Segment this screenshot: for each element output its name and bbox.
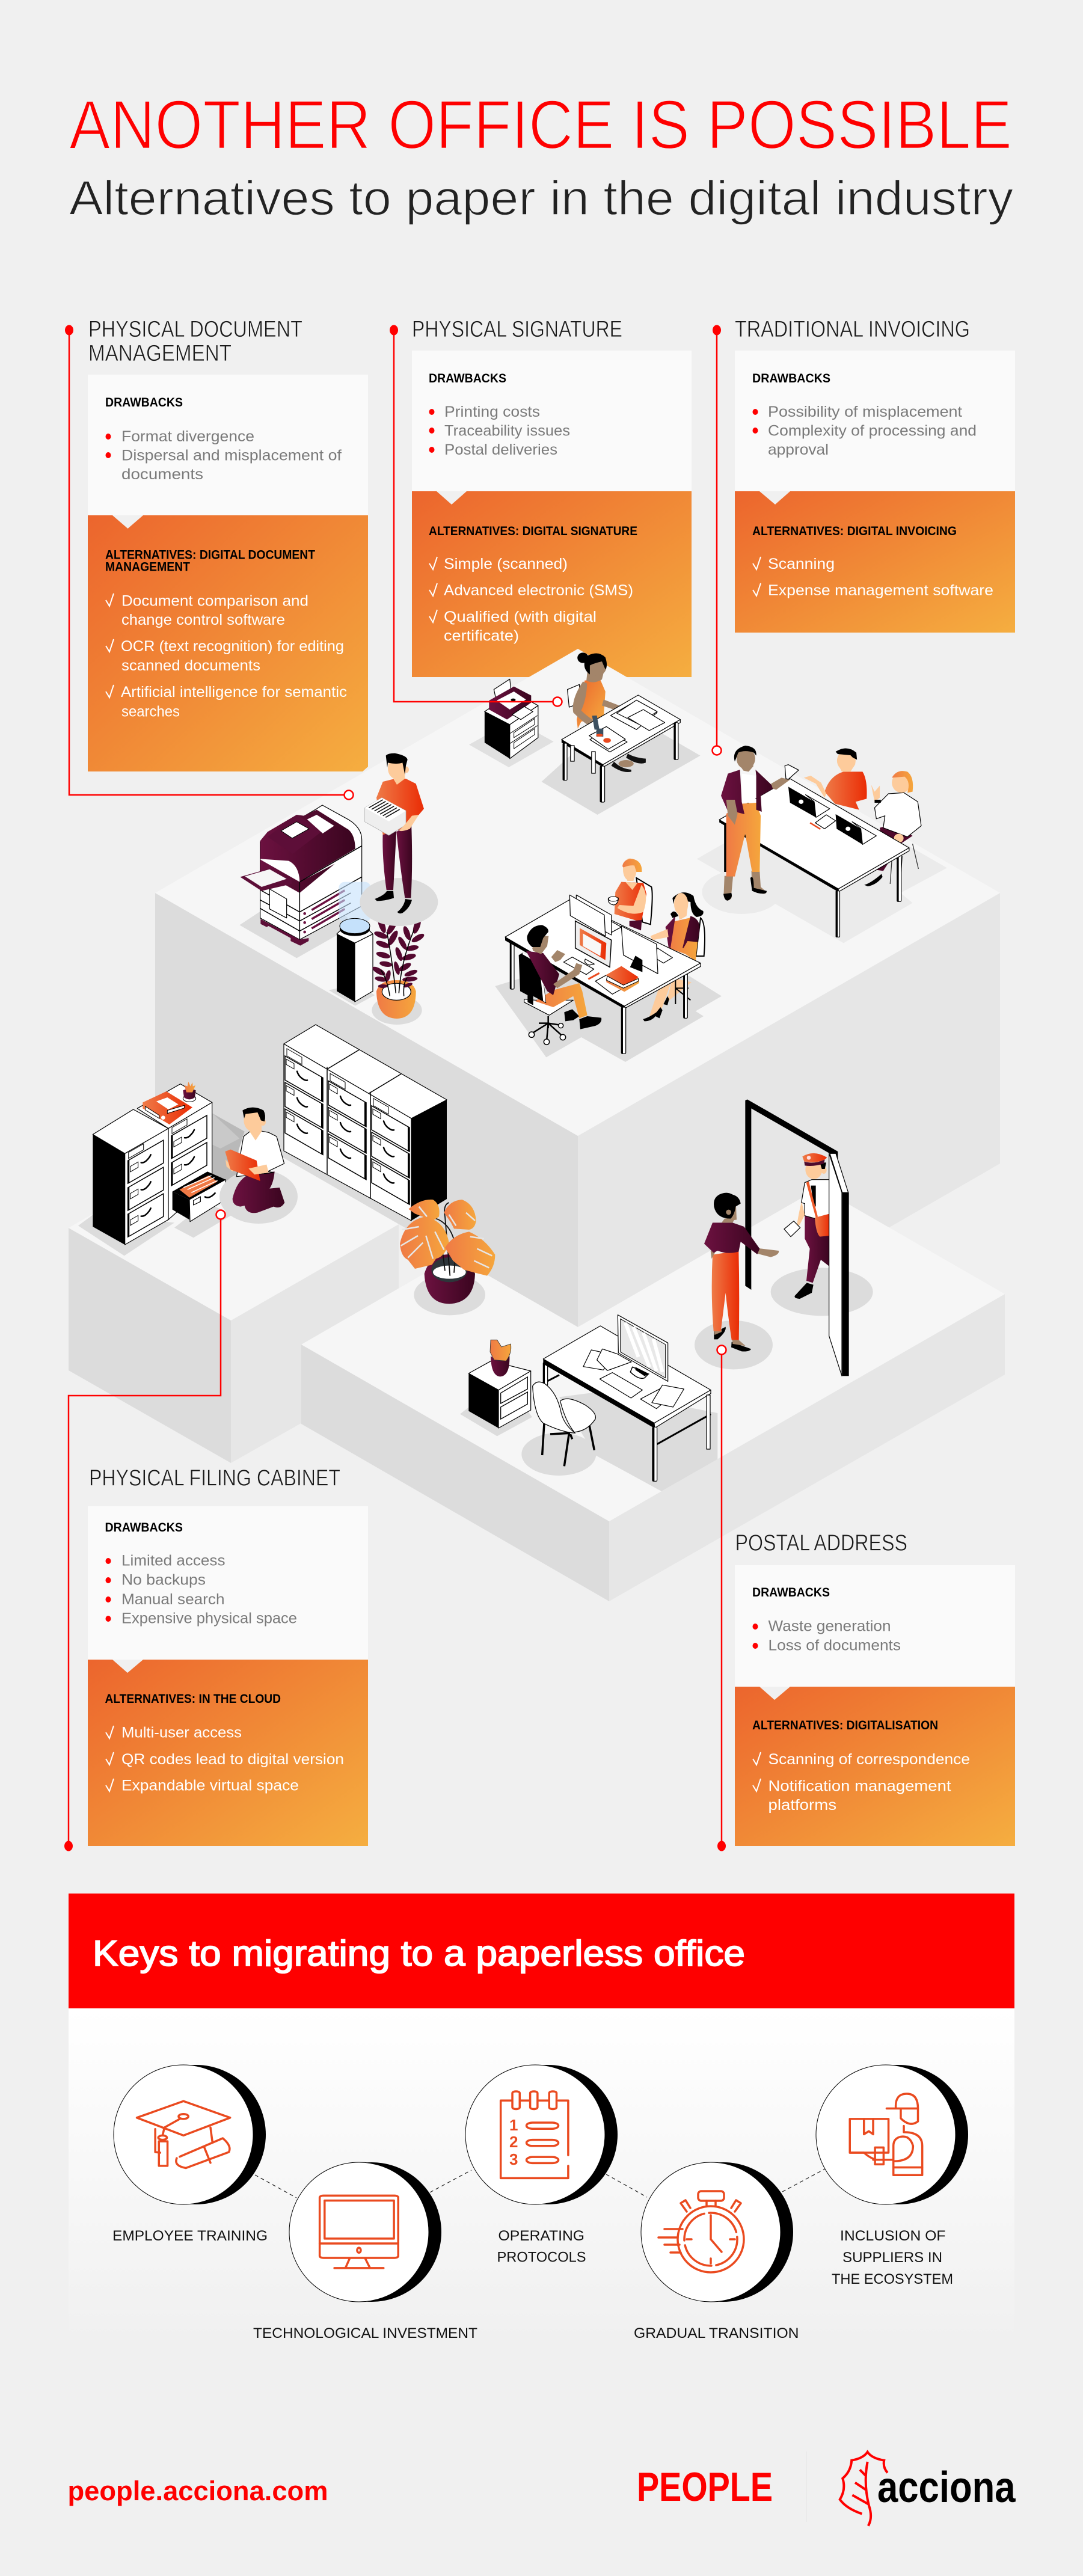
panel: physical filing cabinet (88, 1466, 368, 1846)
floor shadows (695, 1268, 873, 1369)
door (829, 1153, 849, 1376)
label: PROTOCOLS (497, 2249, 586, 2266)
water cooler (329, 918, 375, 1006)
open drawer (173, 1171, 225, 1222)
binder on cabinet (143, 1091, 192, 1124)
woman signing at desk (542, 652, 701, 815)
alternatives list: Qualified (with digital (444, 609, 597, 625)
alternatives list: Expense management software (768, 582, 993, 599)
alternatives list (752, 524, 993, 599)
gray boxes (212, 1114, 245, 1186)
alternatives list: ALTERNATIVES: IN THE CLOUD (105, 1692, 281, 1706)
alternatives list: ALTERNATIVES: DIGITAL SIGNATURE (429, 524, 637, 538)
drawbacks list: Possibility of misplacement (768, 403, 962, 420)
panel: physical document management (88, 317, 368, 771)
alternatives list (429, 524, 637, 645)
drawbacks list (429, 372, 570, 458)
drawbacks list: DRAWBACKS (105, 396, 183, 409)
key: technological investment (253, 2162, 477, 2341)
icon: stopwatch (658, 2191, 744, 2272)
alternatives list: Notification management (769, 1778, 951, 1795)
connector: signature (390, 325, 562, 706)
drawbacks list (105, 396, 342, 483)
scene: plant, side cabinet, desk and chair (400, 1200, 717, 1491)
drawbacks list: Limited access (121, 1553, 225, 1569)
drawbacks list: No backups (121, 1572, 206, 1589)
panel heading: PHYSICAL DOCUMENT (88, 317, 302, 342)
small plant on cabinet (183, 1082, 196, 1102)
panel heading: PHYSICAL SIGNATURE (412, 317, 622, 342)
scene: printer, man with papers, water cooler, plant (239, 753, 438, 1025)
drawbacks list: DRAWBACKS (429, 372, 506, 385)
postman (784, 1153, 830, 1299)
alternatives list: Advanced electronic (SMS) (444, 582, 633, 599)
side cabinet (460, 1361, 532, 1436)
icon: numbered notepad: 3 (509, 2150, 518, 2168)
drawbacks box (735, 351, 1015, 491)
floor shadow (495, 962, 722, 1062)
alternatives list: scanned documents (121, 657, 260, 674)
open drawer and kneeling man (173, 1108, 298, 1224)
man holding papers (360, 753, 438, 926)
connector: filing cabinet (64, 1210, 225, 1851)
icon: leaf (840, 2452, 888, 2526)
label: OPERATING (498, 2228, 584, 2244)
key: operating protocols (465, 2065, 618, 2266)
drawbacks list (105, 1521, 297, 1627)
connector: postal address (717, 1346, 726, 1851)
wordmark: acciona (877, 2464, 1016, 2512)
label: EMPLOYEE TRAINING (112, 2228, 268, 2244)
cabinet shadow (78, 1203, 233, 1256)
scene: door, woman and postman (695, 1099, 873, 1376)
chair (533, 1382, 595, 1466)
seated man in chair (519, 925, 601, 1044)
drawbacks list: Printing costs (444, 403, 540, 420)
alternatives list: MANAGEMENT (105, 560, 190, 574)
drawbacks list (752, 372, 977, 458)
drawbacks list: Traceability issues (444, 422, 570, 439)
icon: graduation cap (137, 2101, 230, 2168)
alternatives box (88, 1660, 368, 1846)
scene: filing cabinet with kneeling man (78, 1082, 245, 1256)
connector: document management (65, 325, 354, 800)
drawbacks list (752, 1586, 901, 1654)
kneeling man (219, 1108, 298, 1224)
alternatives list: searches (121, 704, 180, 720)
red banner (69, 1894, 1014, 2008)
icon: numbered notepad: 1 (509, 2116, 518, 2134)
scene: office desk with three people (495, 858, 722, 1062)
drawbacks list: Format divergence (121, 428, 254, 445)
panel: postal address (735, 1531, 1015, 1846)
monitors and desk items (563, 895, 672, 994)
footer people wordmark: PEOPLE (637, 2464, 773, 2510)
meeting table with three people (697, 746, 947, 943)
alternatives list: ALTERNATIVES: DIGITAL DOCUMENT (105, 548, 315, 562)
alternatives box (412, 491, 692, 677)
seated blond woman (871, 771, 921, 871)
panel heading (88, 317, 302, 366)
icon: delivery person (850, 2094, 922, 2175)
small printer on cabinet (469, 679, 554, 767)
door frame (745, 1099, 838, 1290)
drawbacks list: Loss of documents (769, 1637, 901, 1654)
panel heading: MANAGEMENT (88, 341, 232, 366)
alternatives list: Multi-user access (121, 1725, 242, 1741)
dashed links (255, 2169, 825, 2198)
alternatives list: Expandable virtual space (121, 1777, 299, 1794)
label: INCLUSION OF (840, 2228, 945, 2244)
icon: monitor (320, 2195, 398, 2268)
acciona logo (840, 2452, 1016, 2526)
large plant (400, 1200, 495, 1315)
alternatives box (735, 491, 1015, 633)
desk (505, 900, 701, 1053)
right woman (643, 892, 705, 1021)
drawbacks list: Waste generation (769, 1618, 891, 1634)
icon: numbered notepad: 2 (509, 2133, 518, 2151)
cabinet drawers (128, 1108, 207, 1237)
label: GRADUAL TRANSITION (634, 2325, 799, 2341)
top woman (608, 858, 652, 930)
drawbacks list: approval (768, 441, 829, 458)
panel: physical signature (412, 317, 692, 677)
alternatives list: certificate) (444, 628, 519, 645)
isometric floor (69, 649, 1005, 1601)
alternatives list: ALTERNATIVES: DIGITALISATION (752, 1719, 938, 1732)
panel heading: TRADITIONAL INVOICING (735, 317, 970, 342)
alternatives list: OCR (text recognition) for editing (121, 638, 344, 655)
alternatives list: Artificial intelligence for semantic (121, 684, 347, 701)
alternatives list: Document comparison and (121, 593, 308, 610)
alternatives list (105, 548, 347, 720)
drawbacks list: DRAWBACKS (105, 1521, 183, 1535)
alternatives list (105, 1692, 344, 1794)
drawbacks list: Dispersal and misplacement of (121, 447, 342, 464)
drawbacks list: Complexity of processing and (768, 422, 977, 439)
plant (371, 916, 425, 1025)
panel: traditional invoicing (735, 317, 1015, 633)
printer (239, 805, 371, 958)
label: SUPPLIERS IN (842, 2249, 942, 2266)
meeting table (719, 779, 909, 937)
standing woman (721, 746, 799, 901)
subtitle: Alternatives to paper in the digital industry (69, 171, 1014, 225)
right chair base (675, 978, 690, 1004)
banner title: Keys to migrating to a paperless office (93, 1933, 745, 1973)
alternatives list: QR codes lead to digital version (121, 1751, 344, 1768)
drawbacks box (735, 1565, 1015, 1687)
drawbacks list: DRAWBACKS (752, 1586, 830, 1599)
alternatives list: platforms (769, 1797, 836, 1814)
label (832, 2228, 953, 2287)
footer url: people.acciona.com (67, 2476, 328, 2506)
woman (704, 1193, 779, 1351)
seated man (804, 749, 867, 810)
alternatives list (752, 1719, 970, 1814)
connector: invoicing (712, 325, 722, 755)
keys panel background (69, 2008, 1014, 2345)
key: inclusion of suppliers (816, 2065, 968, 2287)
label: TECHNOLOGICAL INVESTMENT (253, 2325, 477, 2341)
drawbacks list: Postal deliveries (444, 441, 557, 458)
alternatives list: Scanning (768, 556, 835, 572)
panel: keys to migrating (69, 1894, 1014, 2345)
icon: numbered notepad (501, 2091, 568, 2178)
drawbacks box (88, 1506, 368, 1660)
alternatives list: ALTERNATIVES: DIGITAL INVOICING (752, 524, 957, 538)
alternatives list: Simple (scanned) (444, 556, 568, 572)
panel heading: PHYSICAL FILING CABINET (89, 1466, 340, 1491)
desk (521, 1315, 717, 1491)
scene: signature desk, small printer, woman (469, 652, 947, 943)
drawbacks list: Manual search (121, 1591, 225, 1608)
small plant (490, 1340, 511, 1376)
drawbacks box (88, 375, 368, 515)
key: gradual transition (634, 2162, 799, 2341)
drawbacks list: documents (121, 466, 203, 483)
drawbacks list: DRAWBACKS (752, 372, 830, 385)
scene: filing cabinet row (277, 1025, 457, 1231)
label (497, 2228, 586, 2266)
alternatives box (88, 515, 368, 771)
drawbacks list: Expensive physical space (121, 1610, 297, 1627)
panel heading: POSTAL ADDRESS (735, 1531, 907, 1556)
drawbacks box (412, 351, 692, 491)
alternatives list: Scanning of correspondence (769, 1751, 970, 1768)
connector lines (64, 325, 726, 1851)
alternatives list: change control software (121, 612, 285, 628)
key: employee training (112, 2065, 268, 2244)
left cabinets (93, 1084, 212, 1245)
alternatives box (735, 1687, 1015, 1846)
label: THE ECOSYSTEM (832, 2271, 953, 2287)
